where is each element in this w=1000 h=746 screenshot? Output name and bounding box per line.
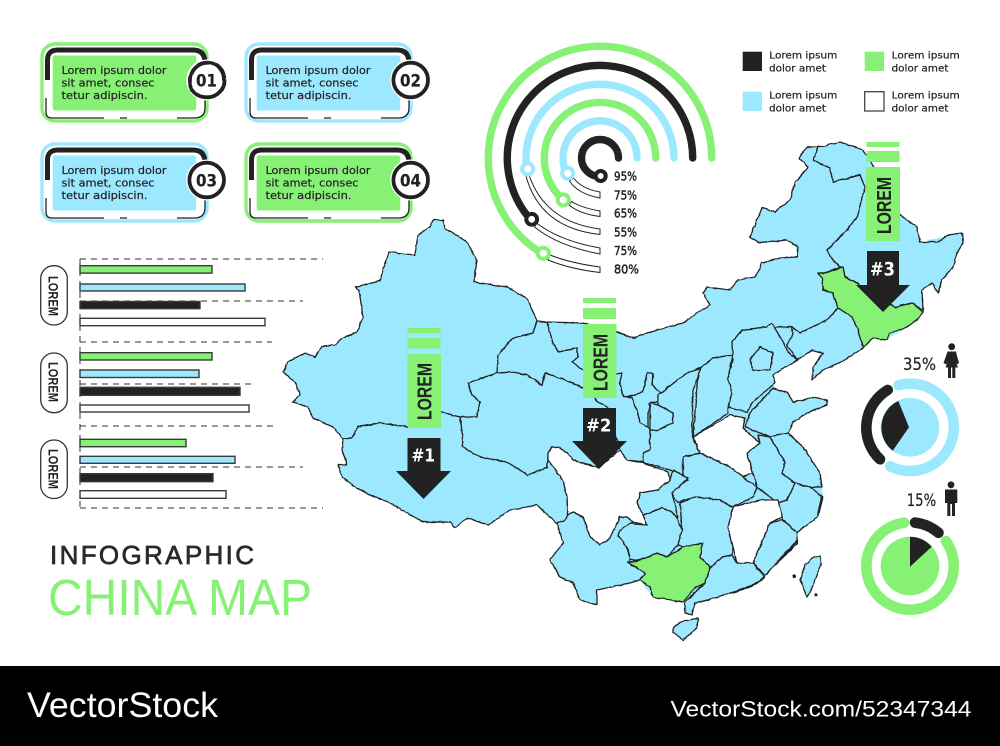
bar group 1	[80, 266, 265, 326]
percent labels: 65%	[614, 206, 637, 220]
map marker 2: LOREM	[590, 334, 612, 391]
province: Sichuan (white)	[548, 447, 670, 545]
province: Fujian	[753, 520, 798, 575]
inner disc	[881, 398, 939, 457]
legend item: blue	[743, 90, 837, 114]
label: 35%	[903, 355, 936, 375]
map marker 1	[396, 328, 451, 499]
text: tetur adipiscin.	[266, 190, 352, 202]
map marker 3	[856, 142, 910, 312]
province: Jiangxi (white)	[728, 500, 782, 563]
province: Hainan	[673, 618, 698, 640]
mainland base fill	[500, 142, 962, 603]
panel 03	[42, 144, 227, 221]
legend item: green	[865, 50, 960, 74]
province: Taiwan	[800, 556, 821, 597]
bar group 3	[80, 439, 235, 498]
url: VectorStock.com/52347344	[670, 696, 972, 722]
province: Guizhou	[618, 508, 682, 560]
donut 15%	[866, 481, 957, 610]
legend item: white	[865, 90, 960, 114]
text: sit amet, consec	[62, 78, 155, 90]
badge: 03	[196, 172, 217, 190]
province: Beijing Tianjin	[750, 347, 773, 370]
province: Jilin (green)	[818, 267, 923, 348]
arrow 2	[572, 408, 627, 469]
province: Guangdong	[685, 555, 765, 615]
map marker 3: #3	[870, 258, 895, 280]
text: Lorem ipsum dolor	[266, 165, 371, 177]
province: Liaoning	[787, 308, 863, 380]
text: sit amet, consec	[62, 178, 155, 190]
province: Heilongjiang	[813, 142, 963, 310]
province: Yunnan	[550, 512, 645, 605]
legend item: blue: dolor amet	[769, 104, 826, 114]
legend item: black	[743, 50, 837, 74]
title	[48, 540, 312, 626]
legend item: blue: Lorem ipsum	[769, 90, 837, 102]
map marker 3: LOREM	[874, 177, 896, 234]
province: Shanxi	[693, 355, 733, 437]
pill label 3	[41, 440, 67, 498]
legend item: black: dolor amet	[769, 64, 826, 74]
badge	[390, 160, 431, 200]
heading: china map: CHINA MAP	[48, 569, 312, 626]
arrow 3	[856, 251, 910, 312]
outer ring	[866, 384, 954, 471]
province: Guangxi (green)	[628, 543, 710, 602]
province: Hunan	[678, 497, 733, 568]
map marker 2: #2	[586, 416, 612, 436]
percent labels	[614, 168, 639, 276]
pill label 1	[41, 266, 67, 325]
province: Xinjiang	[283, 220, 537, 439]
text: sit amet, consec	[266, 178, 359, 190]
province: Jiangsu	[770, 433, 822, 487]
province: Tibet	[338, 412, 568, 528]
connector lines	[526, 175, 600, 272]
badge: 01	[196, 72, 217, 90]
province: Henan (white)	[693, 415, 760, 477]
text: sit amet, consec	[266, 78, 359, 90]
province: Gansu	[497, 321, 650, 462]
badge: 04	[400, 172, 421, 190]
legend item: white: dolor amet	[892, 104, 949, 114]
percent labels: 95%	[614, 168, 637, 184]
province: Hubei	[672, 453, 757, 507]
radial arc chart	[488, 46, 712, 276]
legend	[743, 50, 960, 114]
badge: 02	[400, 72, 421, 90]
percent labels: 75%	[614, 188, 637, 202]
arrow 1	[396, 438, 451, 499]
panel 04	[246, 144, 431, 221]
inner disc	[881, 537, 939, 595]
pill label 2	[41, 353, 67, 413]
legend item: white: Lorem ipsum	[892, 90, 960, 102]
text: Lorem ipsum dolor	[266, 65, 371, 77]
heading: infographic: INFOGRAPHIC	[50, 540, 254, 570]
province: Shandong	[745, 388, 827, 437]
map marker 2	[572, 298, 627, 469]
bar group 2	[80, 353, 249, 412]
arcs	[488, 46, 712, 254]
pill label 3: LOREM	[45, 449, 60, 489]
map marker 1: LOREM	[415, 363, 437, 420]
legend item: green: Lorem ipsum	[892, 50, 960, 62]
province: Shaanxi	[643, 368, 702, 475]
brand: VectorStock	[27, 686, 219, 725]
label: 15%	[907, 491, 936, 511]
outer ring	[866, 523, 954, 610]
panel 01	[42, 44, 227, 121]
bar chart	[41, 259, 323, 508]
badge	[186, 160, 227, 200]
text: tetur adipiscin.	[266, 90, 352, 102]
legend item: black: Lorem ipsum	[769, 50, 837, 62]
text: Lorem ipsum dolor	[62, 165, 167, 177]
pill label 1: LOREM	[45, 276, 60, 316]
pill label 2: LOREM	[45, 362, 60, 402]
donut 35%	[866, 343, 959, 471]
percent labels: 55%	[614, 224, 637, 240]
badge	[390, 60, 431, 100]
text: Lorem ipsum dolor	[62, 65, 167, 77]
province: Ningxia	[628, 373, 660, 427]
province: Inner Mongolia	[547, 147, 865, 397]
panel 02	[246, 44, 431, 121]
icon: man	[945, 481, 957, 516]
arc end markers	[522, 163, 606, 259]
province: Zhejiang	[778, 483, 823, 532]
text: tetur adipiscin.	[62, 190, 148, 202]
province: Chongqing	[637, 470, 688, 518]
china map	[283, 142, 963, 640]
badge	[186, 60, 227, 100]
legend item: green: dolor amet	[892, 64, 949, 74]
province: Gansu east	[650, 403, 673, 430]
percent labels: 75%	[614, 243, 637, 258]
map marker 1: #1	[412, 446, 435, 466]
text: tetur adipiscin.	[62, 90, 148, 102]
province: Qinghai	[460, 372, 620, 475]
province: Anhui	[747, 435, 795, 503]
icon: woman	[944, 343, 959, 378]
footer bar	[0, 666, 1000, 746]
province: Hebei	[728, 323, 797, 412]
percent labels: 80%	[614, 262, 639, 276]
coast detail	[730, 497, 822, 596]
